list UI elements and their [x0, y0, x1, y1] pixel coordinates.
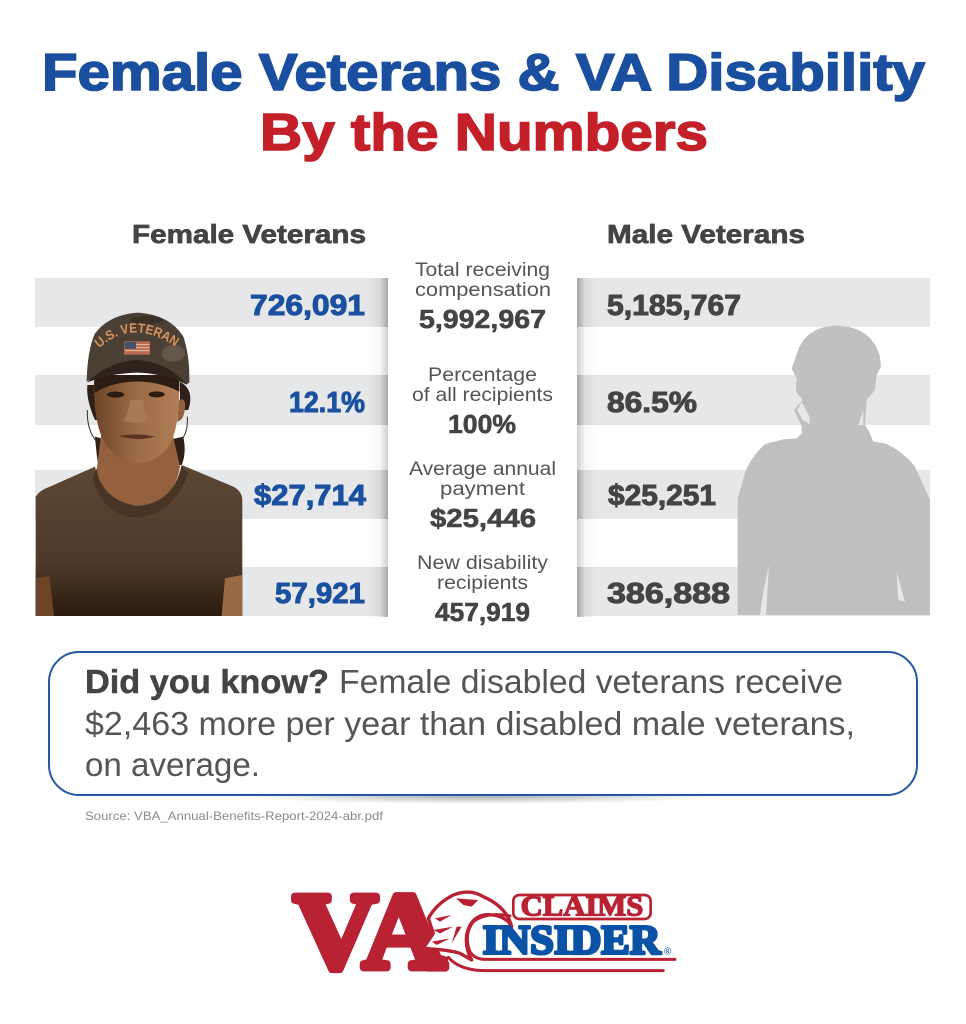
- center metric: average annual payment: $25,446: [430, 503, 536, 533]
- center metric: percentage of all recipients: [412, 365, 553, 439]
- center metric: new disability recipients: [417, 553, 549, 627]
- center metric: total receiving compensation: Total receiving: [415, 260, 550, 281]
- value: $25,251: $25,251: [608, 480, 716, 512]
- center metric: percentage of all recipients: of all recipients: [412, 385, 553, 406]
- fold shadow: [577, 278, 597, 617]
- callout: did you know: Female disabled veterans receive: [339, 663, 843, 700]
- panel: male veterans: [577, 219, 930, 617]
- value: 57,921: 57,921: [275, 578, 365, 610]
- value: 386,888: 386,888: [607, 578, 730, 610]
- logo CLAIMS: CLAIMS: [521, 891, 643, 923]
- logo eagle and swoosh: [420, 892, 675, 972]
- photo: female veteran in cap: [36, 312, 242, 616]
- value: $27,714: $27,714: [254, 480, 366, 512]
- center metric: total receiving compensation: 5,992,967: [419, 304, 546, 334]
- head: [86, 312, 190, 463]
- torso: [36, 430, 242, 616]
- callout: did you know: on average.: [85, 746, 260, 783]
- heading: male veterans: Male Veterans: [607, 219, 805, 249]
- callout: did you know: [49, 652, 917, 804]
- title line 1: Female Veterans & VA Disability: [42, 44, 925, 102]
- callout: did you know: $2,463 more per year than disabled male veterans,: [85, 705, 855, 742]
- center metric: new disability recipients: recipients: [437, 573, 528, 594]
- center metric: average annual payment: [409, 459, 556, 533]
- row bands: [35, 278, 388, 616]
- value: 726,091: 726,091: [250, 290, 365, 322]
- panel: female veterans: [35, 219, 388, 617]
- value: 86.5%: 86.5%: [607, 387, 697, 419]
- icon: soldier silhouette: [738, 326, 930, 615]
- logo registered mark: ®: [664, 946, 672, 957]
- center metric: total receiving compensation: [415, 260, 551, 334]
- center metric: new disability recipients: 457,919: [435, 597, 530, 627]
- center metric: percentage of all recipients: Percentage: [428, 365, 537, 386]
- center metric: new disability recipients: New disability: [417, 553, 549, 574]
- callout: did you know: Did you know?: [85, 663, 329, 700]
- fold shadow: [368, 278, 388, 617]
- row bands: [577, 278, 930, 616]
- center metric: total receiving compensation: compensation: [415, 280, 551, 301]
- center metric: average annual payment: payment: [440, 479, 526, 500]
- value: 12.1%: 12.1%: [289, 387, 365, 419]
- logo INSIDER: INSIDER: [483, 918, 662, 964]
- head: U.S. VETERAN: [94, 323, 180, 347]
- value: 5,185,767: 5,185,767: [607, 290, 741, 322]
- title line 2: By the Numbers: [260, 104, 708, 162]
- center metric: percentage of all recipients: 100%: [448, 409, 516, 439]
- source note: Source: VBA_Annual-Benefits-Report-2024-abr.pdf: [85, 809, 384, 823]
- logo: VA Claims Insider: [294, 871, 675, 992]
- heading: female veterans: Female Veterans: [132, 219, 366, 249]
- title: [42, 44, 925, 162]
- center metric: average annual payment: Average annual: [409, 459, 556, 480]
- logo VA letters: VA: [294, 871, 446, 992]
- hair: [87, 382, 190, 465]
